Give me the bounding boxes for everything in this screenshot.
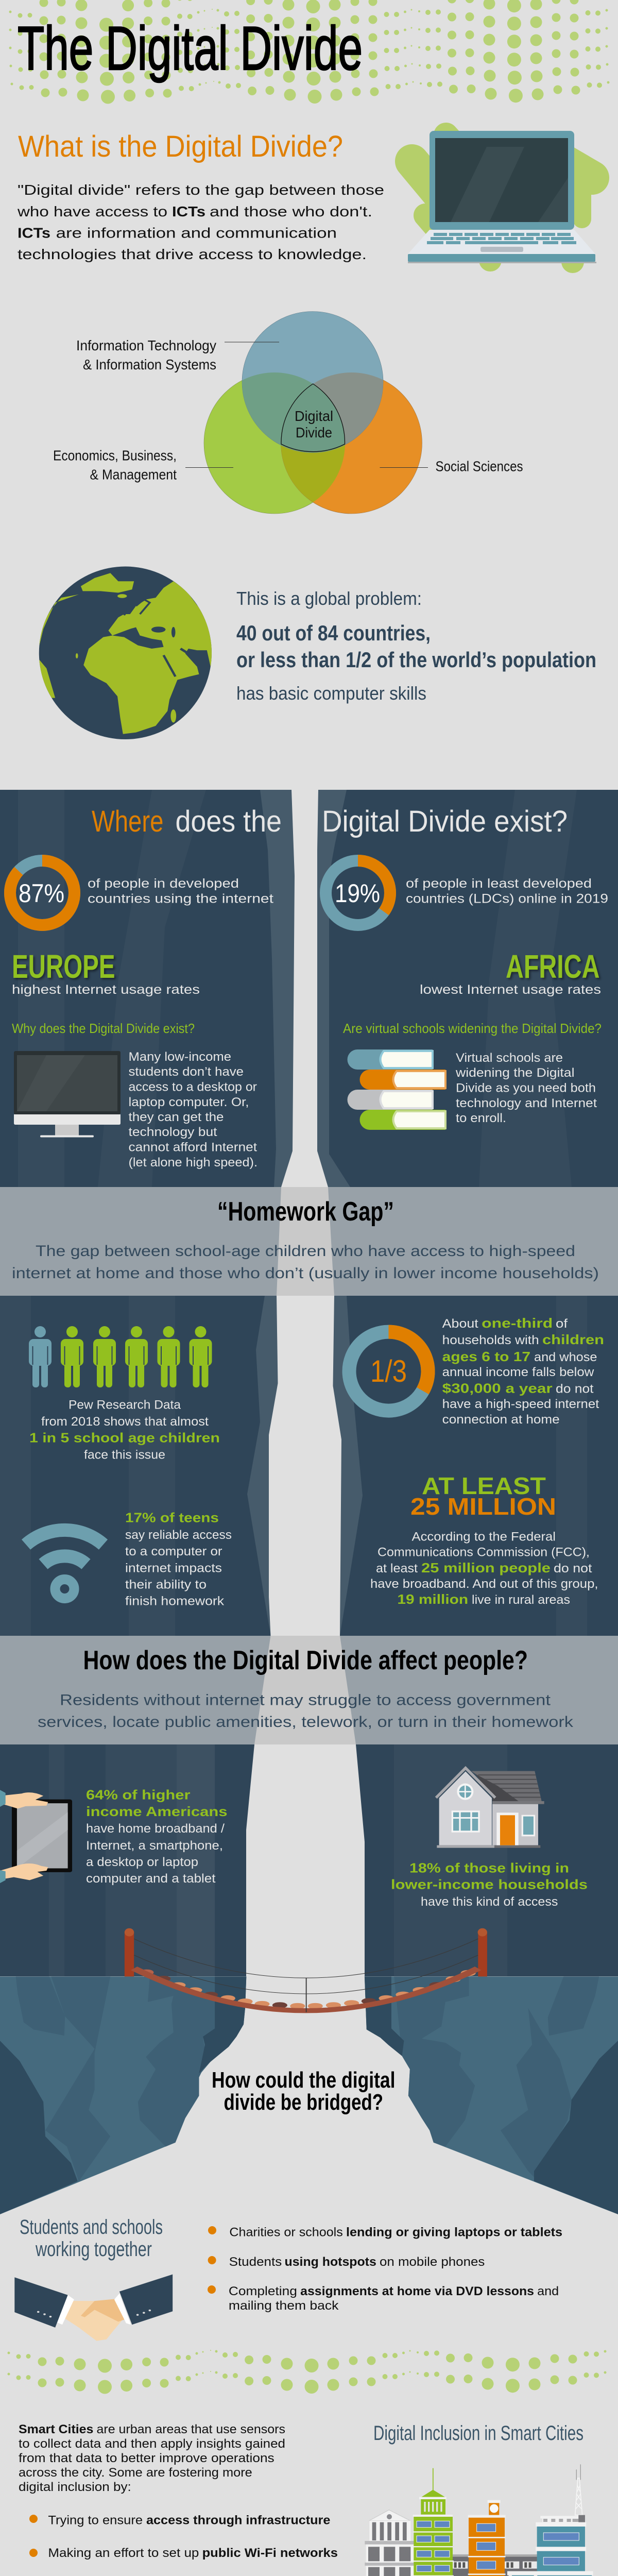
text block: definition: ICTs (172, 204, 205, 219)
text: 64 percent of higher income: a desktop or laptop (86, 1855, 198, 1869)
text: 17 percent of teens: finish homework (125, 1595, 225, 1608)
list: students and schools bullets (208, 2226, 562, 2313)
panel: band how does it affect (0, 1636, 618, 1744)
chart: donut 87 percent: 87% (19, 879, 64, 908)
callout: europe: EUROPE (12, 948, 115, 985)
list: students and schools bullets: Completing (229, 2284, 297, 2298)
text block: global problem: This is a global problem: (236, 588, 422, 609)
callout: at least 25 million: AT LEAST (422, 1472, 546, 1499)
text: smart cities definition: to collect data and then apply insights gained (19, 2437, 285, 2451)
heading: how could the digital divide be bridged: How could the digital (212, 2067, 396, 2093)
text: 87 percent caption: of people in developed (88, 876, 239, 891)
text: 18 percent of lower income: lower-income households (391, 1877, 588, 1892)
text: 64 percent of higher income: computer and a tablet (86, 1872, 216, 1886)
text: one third of households: $30,000 a year (442, 1381, 553, 1396)
heading: what is the digital divide: What is the Digital Divide? (18, 130, 343, 163)
venn labels: Digital (295, 408, 333, 424)
text block: definition (17, 182, 384, 262)
text block: definition: are information and communication (56, 225, 337, 241)
text: pew research: face this issue (84, 1448, 165, 1462)
list: smart cities bullets (29, 2514, 340, 2576)
text: why explanation: students don’t have (129, 1065, 244, 1079)
subheading: why does the digital divide exist: Why does the Digital Divide exist? (12, 1021, 195, 1036)
text: virtual schools explanation: Virtual schools are (456, 1051, 563, 1065)
panel: students and schools (14, 2216, 562, 2341)
callout: europe: highest Internet usage rates (12, 982, 200, 997)
title: The Digital Divide (18, 14, 363, 83)
text: 17 percent of teens: say reliable access (125, 1528, 232, 1542)
callout: at least 25 million: 25 MILLION (410, 1493, 556, 1520)
text: one third of households: connection at home (442, 1413, 560, 1427)
text: homework gap definition: The gap between school-age children who have access to high-speed (36, 1243, 575, 1260)
icon: six people (29, 1326, 212, 1387)
text: why explanation: laptop computer. Or, (129, 1095, 249, 1109)
heading: students and schools working together: working together (35, 2238, 152, 2261)
text: why explanation (129, 1050, 258, 1170)
list: students and schools bullets: and (537, 2284, 559, 2298)
list: smart cities bullets: public Wi-Fi networks (202, 2546, 338, 2560)
text: virtual schools explanation: technology and Internet (456, 1096, 597, 1110)
text: 87 percent caption: countries using the internet (88, 892, 273, 906)
icon: rope bridge (125, 1928, 487, 2012)
text: smart cities definition: digital inclusion by: (19, 2480, 131, 2494)
icon: globe (36, 567, 215, 739)
text: 64 percent of higher income: 64% of higher (86, 1787, 191, 1803)
text: pew research (29, 1398, 220, 1462)
venn labels: & Information Systems (83, 357, 216, 372)
list: students and schools bullets: Charities or schools (229, 2226, 343, 2239)
list: smart cities bullets: access through infrastructure (146, 2514, 330, 2528)
heading: where does the digital divide exist: Digital Divide exist? (322, 805, 568, 838)
text: 87 percent caption (88, 876, 273, 906)
text: smart cities definition: from that data to better improve operations (19, 2451, 274, 2465)
callout: africa: lowest Internet usage rates (420, 982, 601, 997)
heading: how could the digital divide be bridged (212, 2067, 396, 2115)
venn labels: Divide (296, 425, 332, 440)
text: 17 percent of teens: 17% of teens (125, 1510, 219, 1525)
text: 64 percent of higher income (86, 1787, 228, 1886)
text block: definition: "Digital divide" refers to the gap between those (18, 182, 384, 198)
chart: donut 87 percent (10, 860, 74, 925)
icon: laptop (408, 131, 596, 273)
callout: europe (12, 948, 200, 997)
text block: definition: technologies that drive access to knowledge. (18, 246, 367, 262)
heading: homework gap: “Homework Gap” (217, 1197, 394, 1227)
text: 17 percent of teens: internet impacts (125, 1561, 222, 1575)
venn labels: & Management (90, 467, 177, 482)
text: fcc broadband: Communications Commission (FCC), (377, 1545, 590, 1559)
icon: book stack (347, 1049, 445, 1130)
panel: band homework gap (0, 1187, 618, 1296)
text: 18 percent of lower income (391, 1860, 588, 1909)
text: 18 percent of lower income: have this kind of access (421, 1895, 558, 1909)
text: virtual schools explanation: to enroll. (456, 1111, 506, 1125)
chart: donut one third: 1/3 (370, 1354, 407, 1388)
heading: how does the digital divide affect people: How does the Digital Divide affect people? (83, 1646, 528, 1675)
text: residents without internet (38, 1692, 574, 1731)
text: smart cities definition: across the city. Some are fostering more (19, 2466, 252, 2480)
icon: wifi (26, 1530, 103, 1598)
text: one third of households: children (542, 1332, 604, 1347)
text block: definition: ICTs (18, 225, 50, 241)
callout: at least 25 million (410, 1472, 556, 1520)
text: one third of households: households with (442, 1333, 539, 1347)
subheading: are virtual schools widening: Are virtual schools widening the Digital Divide? (343, 1021, 602, 1036)
text: one third of households: do not (556, 1382, 594, 1396)
illustration: smart city skyline (365, 2464, 593, 2576)
list: smart cities bullets: Trying to ensure (48, 2514, 143, 2528)
icon: desktop monitor (14, 1051, 121, 1138)
text: virtual schools explanation: Divide as you need both (456, 1081, 596, 1095)
text: why explanation: access to a desktop or (129, 1080, 257, 1094)
text: 17 percent of teens (125, 1510, 232, 1608)
text: fcc broadband: According to the Federal (412, 1530, 556, 1544)
illustration: canyon cliffs (0, 1976, 618, 2214)
text: residents without internet: services, locate public amenities, telework, or turn in their homework (38, 1714, 574, 1731)
text: why explanation: they can get the (129, 1110, 224, 1124)
text: 19 percent caption (406, 876, 608, 906)
text: pew research: 1 in 5 school age children (29, 1430, 220, 1446)
icon: house (436, 1768, 544, 1848)
text: 19 percent caption: of people in least developed (406, 876, 592, 891)
venn labels: Information Technology (76, 337, 216, 353)
text: one third of households: have a high-speed internet (442, 1397, 599, 1411)
text: why explanation: cannot afford Internet (129, 1141, 257, 1154)
text: one third of households: and whose (534, 1350, 597, 1364)
text block: definition: and those who don't. (210, 204, 372, 219)
text: one third of households: About (442, 1317, 478, 1331)
text: smart cities definition: are urban areas that use sensors (97, 2422, 285, 2436)
text: pew research: from 2018 shows that almost (41, 1415, 209, 1429)
chart: venn diagram (53, 311, 523, 514)
list: students and schools bullets: on mobile phones (380, 2255, 485, 2269)
venn labels: Economics, Business, (53, 447, 177, 464)
text block: global problem (236, 588, 596, 704)
text: 17 percent of teens: to a computer or (125, 1545, 222, 1558)
venn labels (53, 337, 523, 482)
text block: global problem: has basic computer skills (236, 683, 426, 704)
text: why explanation: Many low-income (129, 1050, 231, 1064)
text: virtual schools explanation: widening the Digital (455, 1066, 575, 1080)
text: fcc broadband: live in rural areas (472, 1593, 570, 1607)
text: one third of households: ages 6 to 17 (442, 1349, 530, 1364)
list: students and schools bullets: Students (229, 2255, 282, 2269)
text: one third of households: annual income falls below (442, 1365, 594, 1379)
chart: donut one third (349, 1332, 428, 1411)
text: fcc broadband: at least (376, 1562, 418, 1575)
panel: smart cities (19, 2422, 593, 2576)
text: fcc broadband: do not (554, 1562, 592, 1575)
list: smart cities bullets: Making an effort to set up (48, 2546, 199, 2560)
text: 64 percent of higher income: income Americans (86, 1804, 228, 1819)
text: 19 percent caption: countries (LDCs) online in 2019 (406, 892, 608, 906)
text: 64 percent of higher income: have home broadband / (86, 1822, 225, 1836)
heading: students and schools working together: Students and schools (20, 2216, 163, 2239)
chart: donut 19 percent (325, 860, 390, 925)
heading: how could the digital divide be bridged: divide be bridged? (224, 2090, 383, 2115)
text: smart cities definition (19, 2422, 285, 2494)
list: students and schools bullets: mailing them back (229, 2299, 339, 2313)
text: fcc broadband: 25 million people (421, 1560, 551, 1575)
text: pew research: Pew Research Data (68, 1398, 181, 1412)
text: one third of households: one-third (482, 1315, 553, 1331)
text: fcc broadband (370, 1530, 598, 1607)
list: students and schools bullets: assignments at home via DVD lessons (300, 2284, 534, 2298)
text: why explanation: technology but (129, 1125, 217, 1139)
text: smart cities definition: Smart Cities (19, 2422, 93, 2436)
text block: definition: who have access to (17, 204, 167, 219)
text: homework gap definition (12, 1243, 599, 1282)
text: one third of households (442, 1315, 604, 1427)
heading: where does the digital divide exist (92, 805, 568, 838)
icon: hands holding tablet (0, 1790, 72, 1883)
text: homework gap definition: internet at home and those who don’t (usually in lower income households) (12, 1265, 599, 1282)
icon: handshake (14, 2274, 173, 2341)
venn labels: Social Sciences (436, 459, 523, 474)
text: 18 percent of lower income: 18% of those living in (409, 1860, 569, 1875)
callout: africa (420, 948, 601, 997)
text: fcc broadband: have broadband. And out of this group, (370, 1577, 598, 1591)
heading: where does the digital divide exist: does the (175, 805, 282, 838)
heading: where does the digital divide exist: Where (92, 805, 164, 838)
text: 17 percent of teens: their ability to (125, 1578, 207, 1592)
list: students and schools bullets: using hotspots (284, 2255, 376, 2269)
text: fcc broadband: 19 million (397, 1591, 468, 1607)
heading: students and schools working together (20, 2216, 163, 2261)
text block: global problem: 40 out of 84 countries, (236, 621, 431, 645)
list: students and schools bullets: lending or giving laptops or tablets (346, 2226, 562, 2239)
text: residents without internet: Residents without internet may struggle to access government (60, 1692, 551, 1709)
text: one third of households: of (556, 1317, 568, 1331)
chart: donut 19 percent: 19% (335, 879, 380, 908)
text: 64 percent of higher income: Internet, a smartphone, (86, 1839, 223, 1853)
text: virtual schools explanation (455, 1051, 597, 1125)
text: why explanation: (let alone high speed). (129, 1156, 258, 1170)
